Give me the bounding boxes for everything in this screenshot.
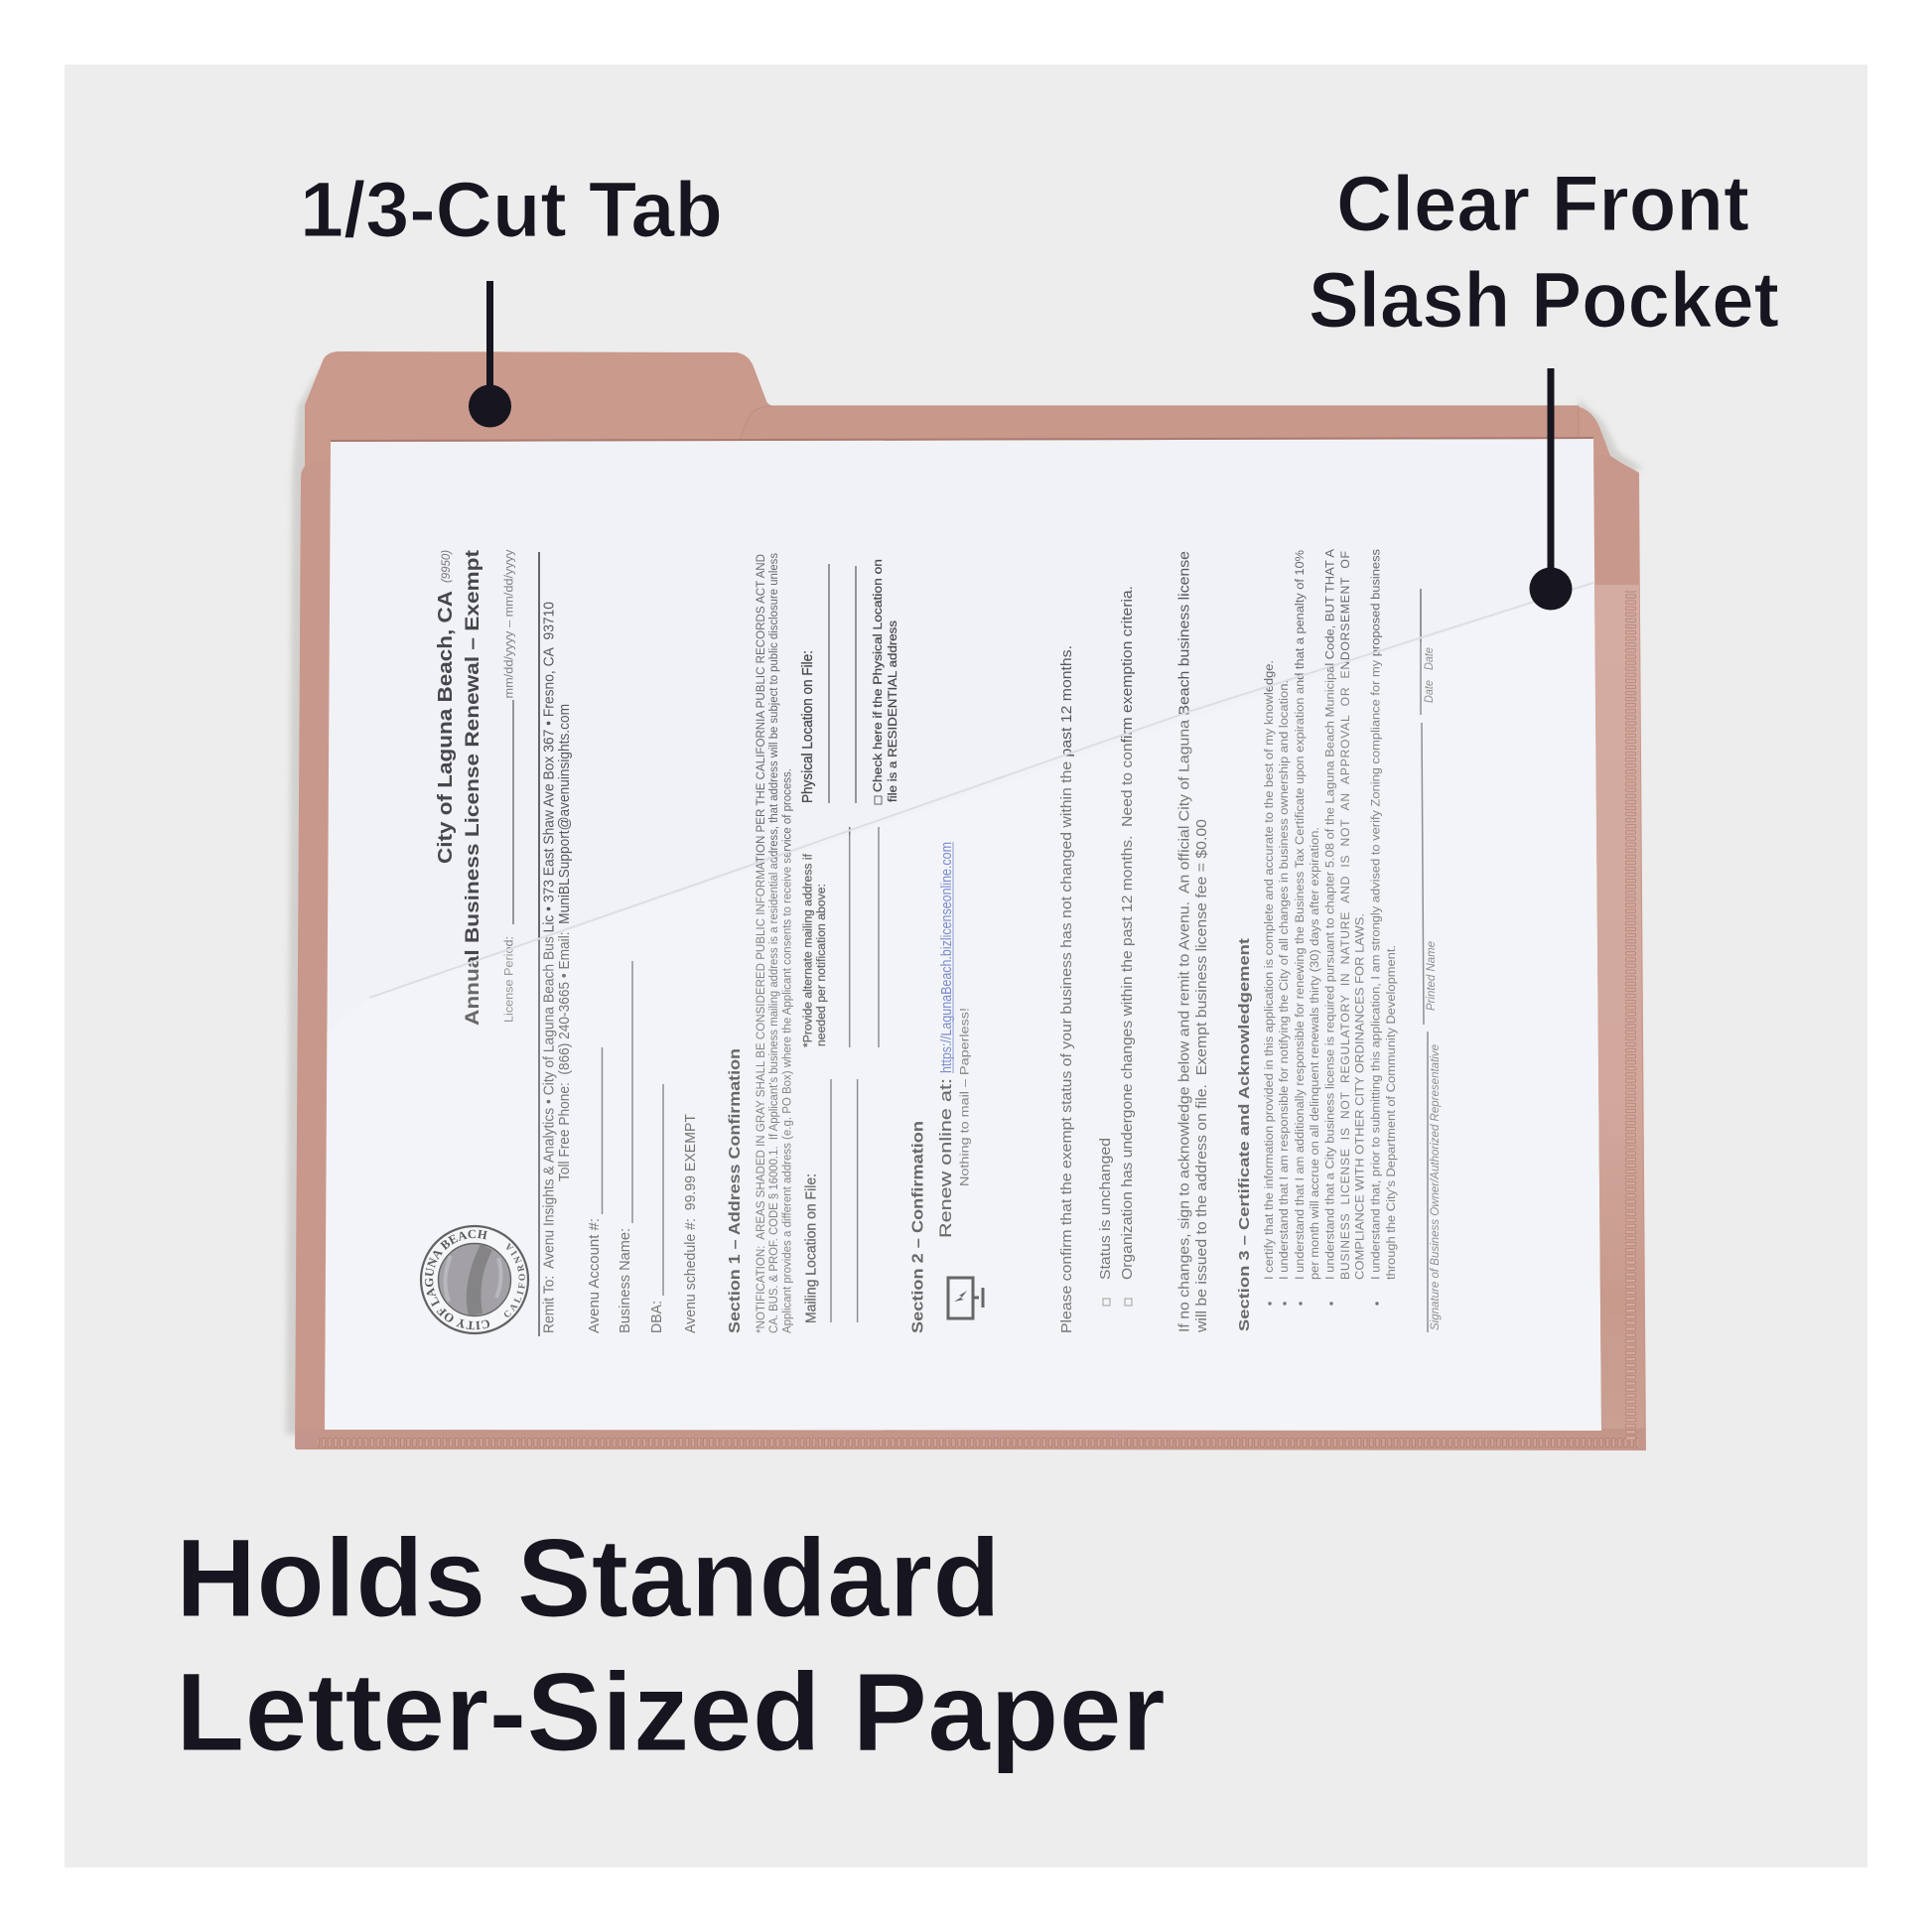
section 2: confirmation: https://LagunaBeach.bizlicenseonline.com [938, 842, 955, 1073]
paper sheet [325, 439, 1601, 1431]
status checklist: Status is unchanged [1097, 1138, 1114, 1280]
section 3: certificate and acknowledgement: I understand that, prior to submitting this application, I am strongly advised to verify Zoning compliance for my proposed business [1369, 549, 1383, 1280]
front pocket folder body [295, 456, 1646, 1450]
status checklist [1058, 586, 1136, 1333]
header block [434, 549, 573, 1336]
account fields: DBA: [648, 1301, 665, 1333]
callout: tab pointer [469, 281, 511, 427]
account fields: Business Name: [617, 1228, 633, 1333]
label: clear front slash pocket: Slash Pocket [1309, 255, 1779, 344]
account fields [586, 961, 699, 1333]
section 2: confirmation: Renew online at: [937, 1078, 955, 1238]
header block: Remit To: Avenu Insights & Analytics • City of Laguna Beach Bus Lic • 373 East Shaw Ave Box 367 • Fresno, CA 93710 [540, 602, 558, 1333]
signature lines: Date [1422, 647, 1436, 670]
section 3: certificate and acknowledgement [1236, 548, 1398, 1331]
header block: mm/dd/yyyy – mm/dd/yyyy [502, 549, 516, 699]
folder shadow [286, 369, 1643, 1435]
section 3: certificate and acknowledgement: I understand that a City business license is required pursuant to chapter 5.08 of the Laguna Beach Municipal Code, BUT THAT A [1322, 548, 1336, 1280]
section 1: address confirmation: file is a RESIDENTIAL address [886, 621, 899, 802]
acknowledgement paragraph: will be issued to the address on file. Exempt business license fee = $0.00 [1193, 819, 1210, 1333]
label: clear front slash pocket: Clear Front [1336, 159, 1749, 247]
signature lines: Signature of Business Owner/Authorized Representative [1428, 1044, 1442, 1330]
acknowledgement paragraph: If no changes, sign to acknowledge below and remit to Avenu. An official City of Laguna Beach business license [1176, 551, 1193, 1332]
section 1: address confirmation: *Provide alternate mailing address if [801, 853, 815, 1047]
section 2: confirmation: Section 2 – Confirmation [909, 1121, 927, 1333]
label: 1/3-cut tab: 1/3-Cut Tab [300, 165, 723, 253]
headline [176, 1516, 1166, 1774]
section 3: certificate and acknowledgement: per month will accrue on all delinquent renewals thirty (30) days after expiration. [1308, 827, 1321, 1280]
section 1: address confirmation: *NOTIFICATION: AREAS SHADED IN GRAY SHALL BE CONSIDERED PUBLIC INFORMATION PER THE CALIFORNIA PUBLIC RECORDS ACT AND [754, 554, 767, 1333]
clear pocket diagonal edge [369, 583, 1593, 998]
header block: City of Laguna Beach, CA [434, 591, 457, 864]
section 1: address confirmation: Mailing Location on File: [802, 1173, 820, 1323]
header block: Annual Business License Renewal – Exempt [462, 549, 483, 1026]
section 3: certificate and acknowledgement: I understand that I am additionally responsible for renewing the Business Tax Certificate upon expiration and that a penalty of 10% [1293, 550, 1307, 1280]
status checklist: Please confirm that the exempt status of your business has not changed within the past 12 months. [1058, 645, 1075, 1333]
city seal: CALIFORNIA [504, 1243, 525, 1317]
section 1: address confirmation: needed per notification above: [814, 884, 828, 1046]
paper top shadow line [331, 438, 1593, 441]
section 1: address confirmation: Applicant provides a different address (e.g. PO Box) where the Applicant consents to receive service of process. [780, 768, 794, 1333]
section 1: address confirmation: Check here if the Physical Location on [871, 559, 885, 792]
signature lines: Printed Name [1424, 941, 1438, 1011]
account fields: Avenu Account #: [586, 1218, 603, 1333]
section 1: address confirmation [727, 553, 899, 1333]
section 2: confirmation: Nothing to mail – Paperless! [957, 1008, 971, 1186]
header block: (9950) [439, 550, 453, 583]
section 3: certificate and acknowledgement: COMPLIANCE WITH OTHER CITY ORDINANCES FOR LAWS. [1353, 913, 1367, 1280]
header block: License Period: [502, 936, 516, 1023]
city seal [419, 1225, 530, 1334]
label: clear front slash pocket [1309, 159, 1779, 344]
acknowledgement paragraph [1176, 551, 1210, 1333]
status checklist: Organization has undergone changes within the past 12 months. Need to confirm exemption criteria. [1119, 586, 1136, 1280]
section 3: certificate and acknowledgement: through the City's Department of Community Development. [1384, 945, 1398, 1280]
callout: pocket pointer [1529, 368, 1573, 610]
section 1: address confirmation: Section 1 – Address Confirmation [727, 1048, 744, 1333]
headline: Holds Standard [176, 1516, 1001, 1640]
headline: Letter-Sized Paper [176, 1650, 1166, 1774]
section 1: address confirmation: CA. BUS. & PROF. CODE § 16000.1. If Applicant's business mailing address is a residential address, that address will be subject to public disclosure unless [766, 553, 780, 1333]
illustration: pink folder with paper [284, 351, 1646, 1450]
section 1: address confirmation: Physical Location on File: [799, 650, 816, 803]
city seal: CITY OF LAGUNA BEACH [425, 1229, 489, 1330]
signature lines [1421, 589, 1442, 1332]
document text [419, 548, 1442, 1336]
section 3: certificate and acknowledgement: I understand that I am responsible for notifying the City of all changes in business ownership and location. [1277, 680, 1291, 1280]
bottom weld strip [296, 1429, 1645, 1449]
clear pocket right flap [1594, 585, 1644, 1440]
header block: Toll Free Phone: (866) 240-3665 • Email: MuniBLSupport@avenuinsights.com [556, 704, 573, 1181]
section 3: certificate and acknowledgement: BUSINESS LICENSE IS NOT REGULATORY IN NATURE AND IS NOT AN APPROVAL OR ENDORSEMENT OF [1338, 551, 1352, 1280]
section 3: certificate and acknowledgement: Section 3 – Certificate and Acknowledgement [1236, 938, 1253, 1331]
icon: monitor with lightning bolt [948, 1278, 983, 1318]
section 3: certificate and acknowledgement: I certify that the information provided in this application is complete and accurate to the best of my knowledge. [1262, 660, 1276, 1280]
clear pocket sheen [325, 583, 1601, 1430]
back folder with tab [305, 351, 1610, 477]
section 2: confirmation [909, 842, 983, 1333]
signature lines: Date [1422, 680, 1436, 703]
account fields: Avenu schedule #: 99.99 EXEMPT [682, 1114, 699, 1333]
back folder fold seam [740, 406, 1579, 442]
